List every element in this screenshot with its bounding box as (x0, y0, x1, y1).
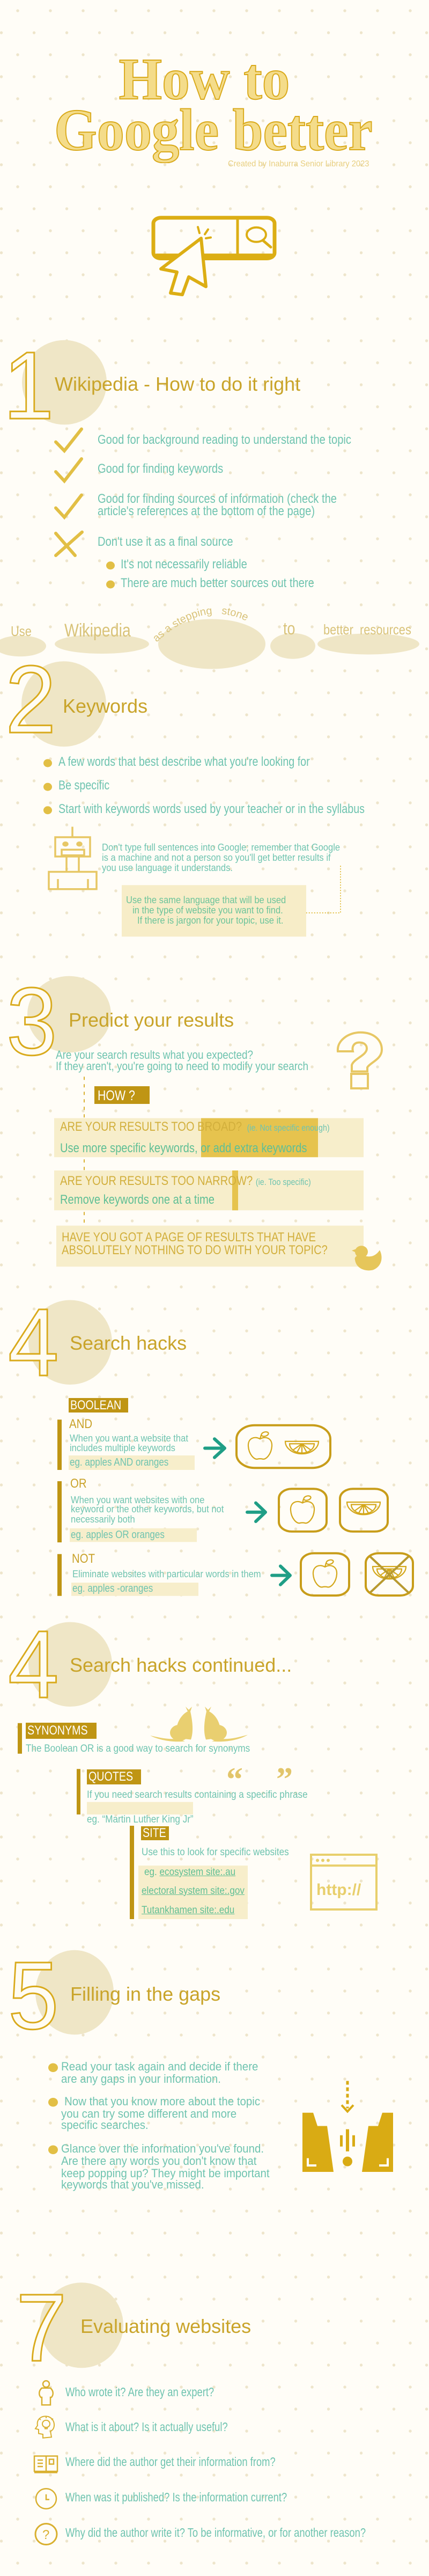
text: site: electoral system site:.gov (142, 1885, 245, 1897)
text: gaps bullets: Are there any words you don't know that (61, 2154, 256, 2168)
example boxes: boolean (69, 1455, 198, 1596)
icon: duck (352, 1246, 382, 1270)
stepping stone words: Use (11, 623, 32, 639)
heading: Filling in the gaps: Filling in the gaps (70, 1983, 220, 2005)
text: site: eg. ecosystem site:.au (144, 1867, 235, 1878)
text: OR (70, 1476, 224, 1541)
icon: book (34, 2456, 57, 2472)
number 4: 4 (8, 1289, 59, 1396)
heading: Keywords: Keywords (63, 695, 147, 717)
text: evaluating questions: When was it published? Is the information current? (65, 2490, 287, 2504)
icon: head with bulb (35, 2416, 54, 2438)
group: section 4 continued shapes (18, 1622, 376, 1919)
icon: check 1 (56, 429, 82, 451)
text: wikipedia points: Good for background reading to understand the topic (98, 433, 351, 447)
group: section 2 shapes (21, 661, 341, 936)
icon: question mark (338, 1033, 382, 1088)
icon: orange or (340, 1489, 388, 1532)
text: evaluating questions: Who wrote it? Are they an expert? (65, 2385, 214, 2399)
label: BOOLEAN: BOOLEAN (70, 1397, 121, 1413)
text: robot note (102, 842, 340, 873)
text: gaps bullets: specific searches. (61, 2118, 149, 2132)
text: AND: eg. apples AND oranges (70, 1457, 168, 1468)
text: AND: includes multiple keywords (70, 1443, 175, 1453)
text: callout same language: in the type of website you want to find. (132, 905, 283, 916)
subtitle: credit: Created by Inaburra Senior Library 2023 (228, 159, 369, 169)
text: NOT: eg. apples -oranges (72, 1583, 153, 1594)
bullets: section 5 (48, 2063, 58, 2154)
text: gaps bullets: keep popping up? They might be important (61, 2167, 270, 2180)
text: too narrow: Remove keywords one at a time (60, 1192, 214, 1207)
dotted connector (306, 866, 341, 913)
dashed line: section 3 (84, 1077, 85, 1225)
bars: boolean (57, 1419, 62, 1596)
text: robot note: you use language it understands. (102, 862, 233, 873)
text: too broad: ARE YOUR RESULTS TOO BROAD? (ie. Not specific enough) (60, 1119, 330, 1134)
text: gaps bullets (61, 2060, 270, 2191)
text: site (142, 1847, 289, 1916)
text: wikipedia points: It's not necessarily reliable (121, 557, 247, 572)
circle: section 2 (21, 661, 106, 747)
curved text: as a stepping stone: as a stepping stone (154, 608, 248, 642)
text: site: Tutankhamen site:.edu (142, 1905, 234, 1916)
icon: http text: http:// (316, 1881, 361, 1899)
text: predict intro (56, 1048, 308, 1073)
icon: browser frame (311, 1855, 376, 1909)
text: OR: OR (70, 1476, 87, 1491)
stepping stones (0, 619, 419, 669)
bar: synonyms (18, 1723, 22, 1754)
text: robot note: Don't type full sentences into Google; remember that Google (102, 842, 340, 853)
text: keyword bullets: Start with keywords words used by your teacher or in the syllabus (58, 802, 365, 816)
icon: clock (36, 2489, 56, 2509)
text: evaluating questions: Why did the author write it? To be informative, or for another reason? (65, 2526, 366, 2540)
icon: apple and orange (236, 1425, 330, 1468)
arrow: AND (205, 1439, 225, 1458)
bar: site (130, 1826, 134, 1919)
heading: Search hacks: Search hacks (70, 1332, 187, 1354)
bar: quotes (77, 1769, 80, 1814)
icon: cats (150, 1707, 248, 1741)
box: too broad (54, 1118, 364, 1157)
text: too narrow (60, 1174, 311, 1207)
box: nothing to do with topic (56, 1226, 364, 1267)
number 3: 3 (6, 968, 57, 1075)
text: evaluating questions: Where did the author get their information from? (65, 2455, 276, 2469)
icon: question circle (35, 2523, 57, 2545)
text: wikipedia points: Good for finding sources of information (check the (98, 492, 337, 506)
title: Google better: Google better (54, 97, 373, 163)
stepping stone words (11, 619, 411, 641)
text: evaluating questions: What is it about? Is it actually useful? (65, 2420, 228, 2434)
heading: Search hacks continued: Search hacks continued... (70, 1654, 292, 1676)
text: too broad: Use more specific keywords, or add extra keywords (60, 1141, 307, 1155)
icon: person (39, 2381, 53, 2405)
circle: section 1 (22, 340, 107, 425)
text: nothing to do with topic: ABSOLUTELY NOTHING TO DO WITH YOUR TOPIC? (62, 1243, 328, 1257)
group: section 4 shapes (28, 1300, 413, 1596)
stepping stone words: to (283, 619, 295, 638)
group: section 3 shapes (27, 976, 382, 1270)
text: gaps bullets: Read your task again and decide if there (61, 2060, 258, 2073)
group: section 7 shapes (34, 2282, 123, 2545)
icon: robot (49, 826, 97, 889)
icon: question circle mark: ? (42, 2528, 49, 2542)
number 2: 2 (5, 646, 56, 753)
circle: section 7 (40, 2282, 123, 2368)
text: predict intro: Are your search results what you expected? (56, 1048, 253, 1062)
text: evaluating questions (65, 2385, 366, 2540)
stepping stone words: better resources (323, 621, 411, 638)
text: too narrow: ARE YOUR RESULTS TOO NARROW? (ie. Too specific) (60, 1174, 311, 1188)
text: callout same language: Use the same language that will be used (126, 895, 286, 905)
empty box: quotes (87, 1802, 193, 1814)
text: robot note: is a machine and not a person so you'll get better results if (102, 852, 331, 863)
group: section 1 shapes (0, 340, 419, 669)
text: site: Use this to look for specific websites (142, 1847, 289, 1858)
text: AND (69, 1417, 188, 1468)
text: gaps bullets: are any gaps in your information. (61, 2072, 221, 2085)
text: gaps bullets: Glance over the information you've found. (61, 2142, 264, 2155)
number 1: 1 (3, 332, 54, 439)
text: synonyms: The Boolean OR is a good way to search for synonyms (26, 1743, 250, 1754)
text: too broad (60, 1119, 330, 1155)
icon: check 2 (56, 459, 82, 481)
text: OR: keyword or the other keywords, but not (71, 1504, 224, 1514)
icon: filling the gap (302, 2081, 393, 2172)
arrow: NOT (272, 1566, 290, 1585)
heading: Evaluating websites: Evaluating websites (80, 2315, 251, 2337)
icon: crossed orange (366, 1553, 413, 1596)
text: quotes: eg. “Martin Luther King Jr” (87, 1814, 194, 1825)
title: How to: How to (119, 46, 290, 112)
number 5: 5 (8, 1942, 59, 2049)
icon: cross (56, 532, 82, 555)
text: keyword bullets (58, 755, 365, 816)
text: callout same language (126, 895, 286, 926)
circle: section 4 (28, 1300, 112, 1385)
text: gaps bullets: keywords that you've missed. (61, 2178, 204, 2191)
text: quotes (87, 1789, 308, 1825)
heading: Wikipedia: Wikipedia - How to do it right (55, 373, 300, 395)
text: gaps bullets: you can try some different and more (61, 2107, 236, 2120)
circle: section 4 continued (28, 1622, 112, 1707)
text: NOT: NOT (72, 1552, 95, 1566)
icon: check 3 (56, 495, 82, 517)
label: HOW? (94, 1086, 150, 1104)
text: keyword bullets: A few words that best describe what you're looking for (58, 755, 310, 769)
text: wikipedia points: article's references at the bottom of the page) (98, 504, 315, 518)
text: gaps bullets: Now that you know more about the topic (64, 2095, 260, 2108)
text: NOT: Eliminate websites with particular words in them (72, 1569, 261, 1579)
text: predict intro: If they aren't, you're going to need to modify your search (56, 1059, 308, 1073)
stepping stone words: Wikipedia (64, 620, 131, 641)
icon: apple or (279, 1489, 327, 1532)
label: QUOTES: QUOTES (88, 1769, 133, 1784)
circle: section 5 (35, 1950, 114, 2035)
label: SYNONYMS: SYNONYMS (27, 1723, 88, 1738)
text: keyword bullets: Be specific (58, 778, 109, 793)
heading: Predict: Predict your results (69, 1009, 234, 1031)
text: nothing to do with topic: HAVE YOU GOT A PAGE OF RESULTS THAT HAVE (62, 1230, 316, 1245)
text: wikipedia points: There are much better sources out there (121, 576, 314, 590)
arrow: OR (247, 1503, 265, 1521)
text: OR: necessarily both (71, 1514, 135, 1525)
text: wikipedia points: Don't use it as a final source (98, 535, 233, 549)
label: HOW?: HOW ? (98, 1087, 135, 1103)
text: NOT (72, 1552, 261, 1594)
icon: search bar with cursor (153, 218, 275, 295)
text: wikipedia points: Good for finding keywords (98, 462, 223, 476)
text: OR: When you want websites with one (71, 1495, 204, 1505)
text: OR: eg. apples OR oranges (71, 1529, 165, 1541)
icon: quote marks: “ ” (226, 1761, 293, 1798)
text: AND: AND (69, 1417, 92, 1431)
number 7: 7 (16, 2274, 67, 2381)
box: too narrow (54, 1170, 364, 1210)
number 4 continued: 4 (8, 1611, 59, 1718)
callout box: same language (122, 885, 306, 936)
text: nothing to do with topic (62, 1230, 328, 1257)
bullets: section 1 (106, 561, 115, 588)
group: section 5 shapes (35, 1950, 393, 2172)
text: callout same language: If there is jargon for your topic, use it. (137, 915, 283, 926)
bullets: section 2 (43, 759, 52, 814)
text: wikipedia points (98, 433, 351, 590)
text: AND: When you want a website that (70, 1433, 188, 1444)
label: SITE: SITE (143, 1826, 166, 1840)
icon: apple not (301, 1553, 349, 1596)
text: quotes: If you need search results containing a specific phrase (87, 1789, 308, 1801)
example box: site (138, 1865, 248, 1919)
circle: section 3 (27, 976, 111, 1052)
